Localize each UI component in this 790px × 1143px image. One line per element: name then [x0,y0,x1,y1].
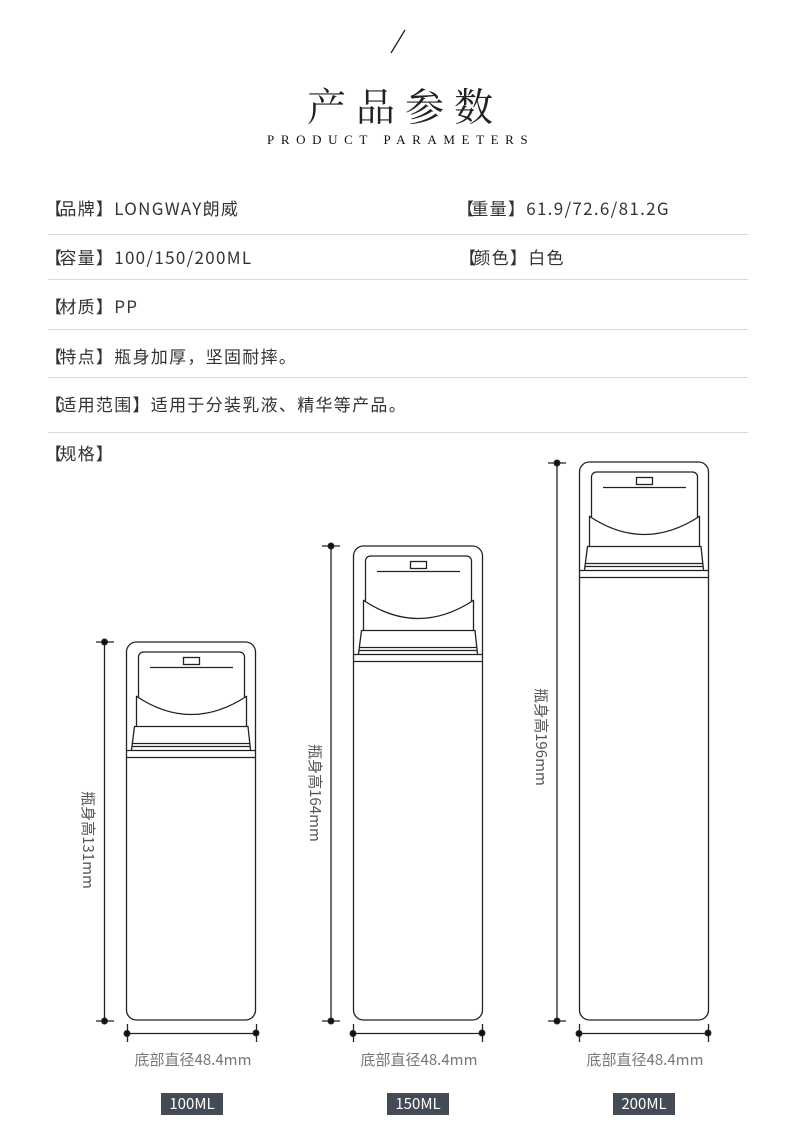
spec: features: 【特点】瓶身加厚，坚固耐摔。 [45,343,297,368]
width dimension 200ML [576,1024,711,1042]
slash mark [390,30,406,54]
badge 200ML: 200ML [621,1093,667,1114]
spec: capacity: 【容量】100/150/200ML [45,244,252,269]
height label 200ML: 瓶身高196mm [531,688,552,786]
spec: usage: 【适用范围】适用于分装乳液、精华等产品。 [45,391,407,416]
spec: brand: 【品牌】LONGWAY朗威 [45,195,239,220]
bottle 150ML [353,546,483,1020]
height dimension 100ML [96,639,114,1024]
badge 100ML [161,1093,223,1115]
spec: weight: 【重量】61.9/72.6/81.2G [457,195,670,220]
bottle 200ML [579,462,709,1020]
base diameter label 200ML: 底部直径48.4mm [587,1049,703,1070]
width dimension 150ML [350,1024,485,1042]
height label 150ML: 瓶身高164mm [305,744,326,842]
height dimension 150ML [322,543,340,1024]
height dimension 200ML [548,460,566,1024]
badge 100ML: 100ML [169,1093,215,1114]
spec: dimensions heading: 【规格】 [45,440,114,465]
badge 200ML [613,1093,675,1115]
spec: material: 【材质】PP [45,293,138,318]
subtitle: PRODUCT PARAMETERS [267,132,534,147]
height label 100ML: 瓶身高131mm [78,791,99,889]
width dimension 100ML [124,1024,259,1042]
spec: colour: 【颜色】白色 [459,244,565,269]
bottle 100ML [126,642,256,1020]
badge 150ML: 150ML [395,1093,441,1114]
badge 150ML [387,1093,449,1115]
title: 产品参数 [307,77,503,133]
base diameter label 100ML: 底部直径48.4mm [135,1049,251,1070]
base diameter label 150ML: 底部直径48.4mm [361,1049,477,1070]
